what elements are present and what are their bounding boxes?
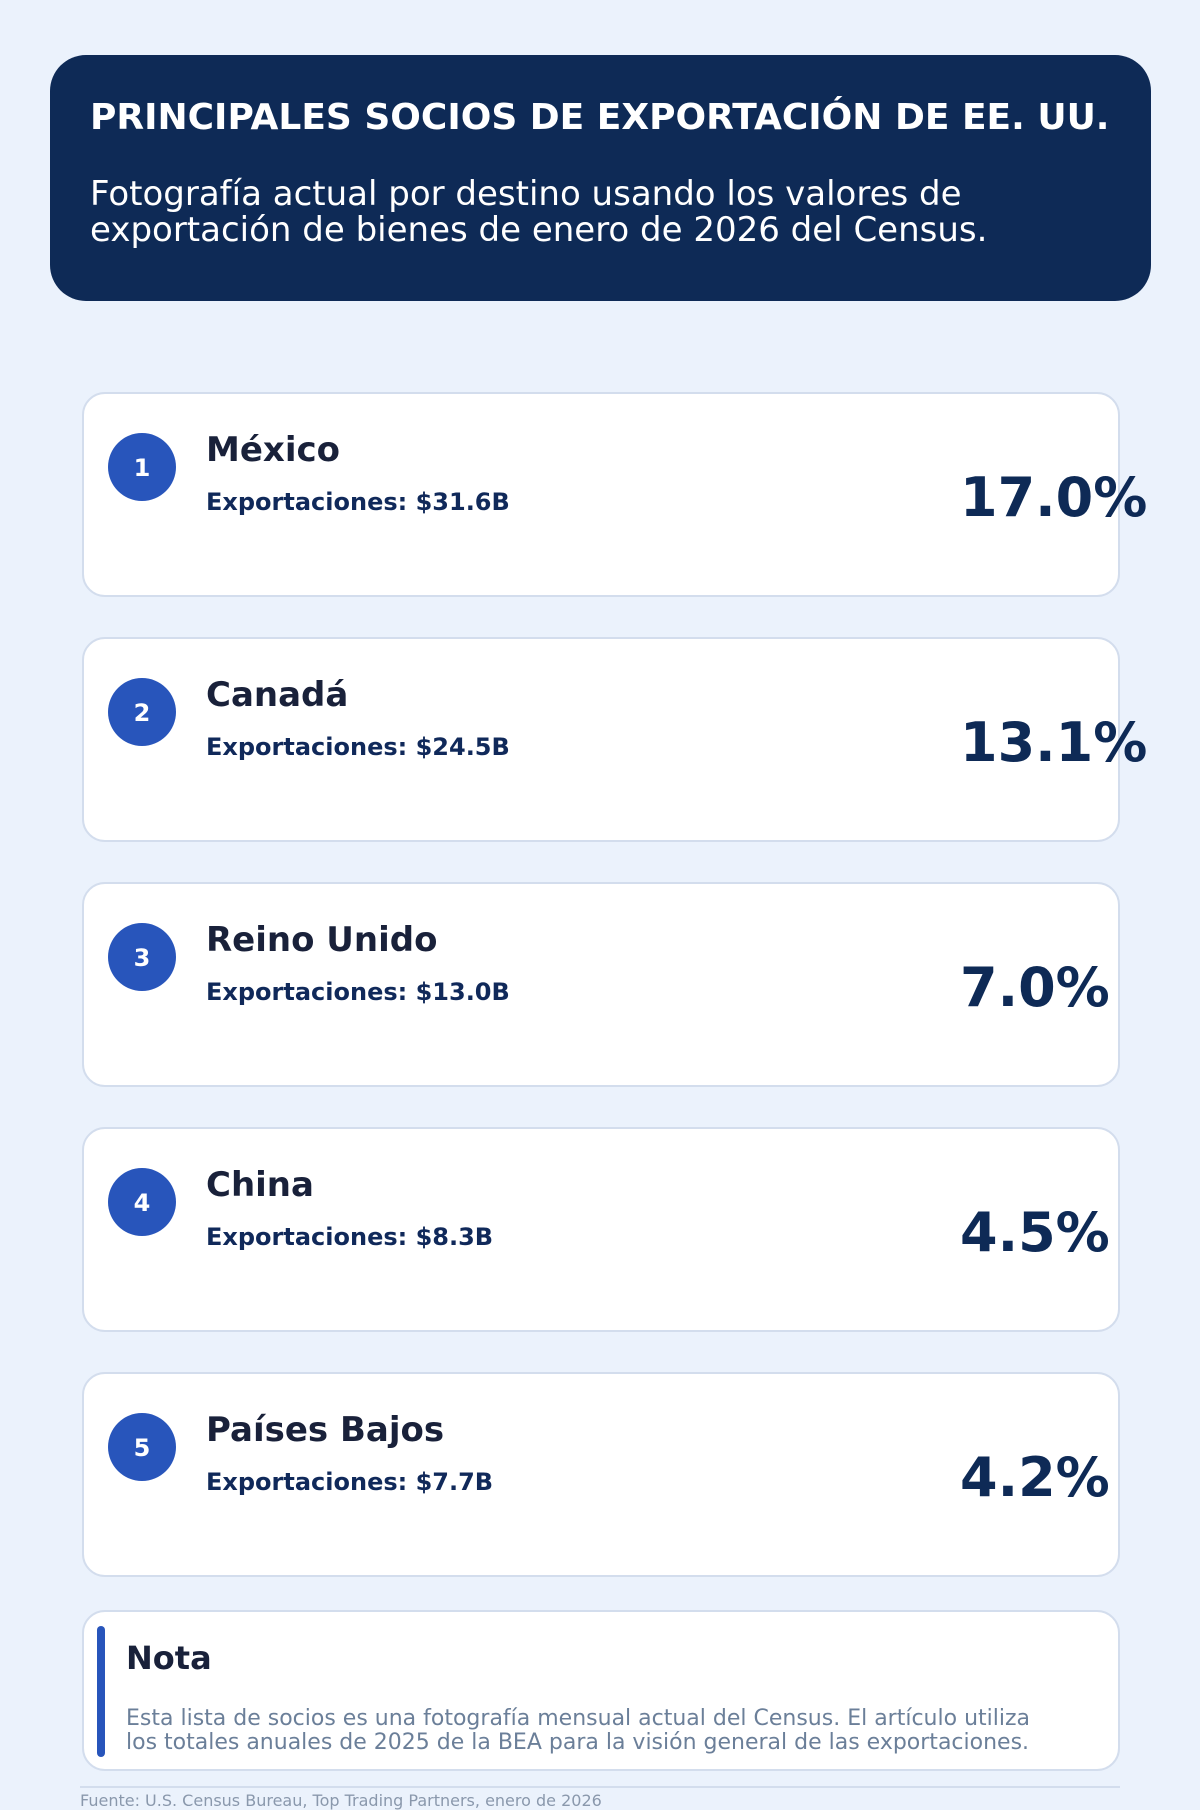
rank badge 4: 4 bbox=[134, 1189, 150, 1217]
card: Países Bajos bbox=[82, 1372, 1120, 1577]
note text: los totales anuales de 2025 de la BEA para la visión general de las exportaciones. bbox=[126, 1730, 1029, 1755]
rank badge 3 bbox=[108, 923, 176, 991]
note text bbox=[126, 1706, 1030, 1755]
card: Reino Unido bbox=[82, 882, 1120, 1087]
card: China bbox=[82, 1127, 1120, 1332]
share percentage: 17.0% bbox=[960, 466, 1147, 529]
exports value: Exportaciones: $7.7B bbox=[206, 1468, 493, 1496]
rank badge 1 bbox=[108, 433, 176, 501]
country name: México bbox=[206, 430, 340, 470]
note text: Esta lista de socios es una fotografía mensual actual del Census. El artículo utiliza bbox=[126, 1706, 1030, 1731]
country name: Reino Unido bbox=[206, 920, 437, 960]
share percentage: 4.2% bbox=[960, 1446, 1110, 1509]
share percentage: 4.5% bbox=[960, 1201, 1110, 1264]
country name: Países Bajos bbox=[206, 1410, 444, 1450]
exports value: Exportaciones: $13.0B bbox=[206, 978, 510, 1006]
exports value: Exportaciones: $8.3B bbox=[206, 1223, 493, 1251]
rank badge 4 bbox=[108, 1168, 176, 1236]
card: México bbox=[82, 392, 1120, 597]
card: Canadá bbox=[82, 637, 1120, 842]
country name: Canadá bbox=[206, 675, 348, 715]
source footer: Fuente: U.S. Census Bureau, Top Trading Partners, enero de 2026 bbox=[80, 1791, 602, 1810]
rank badge 2: 2 bbox=[134, 699, 150, 727]
rank badge 1: 1 bbox=[134, 454, 150, 482]
note heading: Nota bbox=[126, 1639, 212, 1677]
exports value: Exportaciones: $24.5B bbox=[206, 733, 510, 761]
share percentage: 13.1% bbox=[960, 711, 1147, 774]
title: PRINCIPALES SOCIOS DE EXPORTACIÓN DE EE. UU. bbox=[90, 97, 1109, 138]
note panel bbox=[82, 1610, 1120, 1771]
subtitle: exportación de bienes de enero de 2026 del Census. bbox=[90, 210, 987, 250]
rank badge 5 bbox=[108, 1413, 176, 1481]
rank badge 3: 3 bbox=[134, 944, 150, 972]
country name: China bbox=[206, 1165, 314, 1205]
accent bar bbox=[97, 1626, 105, 1757]
rank badge 5: 5 bbox=[134, 1434, 150, 1462]
share percentage: 7.0% bbox=[960, 956, 1110, 1019]
subtitle bbox=[90, 174, 987, 250]
subtitle: Fotografía actual por destino usando los valores de bbox=[90, 174, 962, 214]
header bbox=[50, 55, 1151, 301]
exports value: Exportaciones: $31.6B bbox=[206, 488, 510, 516]
rank badge 2 bbox=[108, 678, 176, 746]
